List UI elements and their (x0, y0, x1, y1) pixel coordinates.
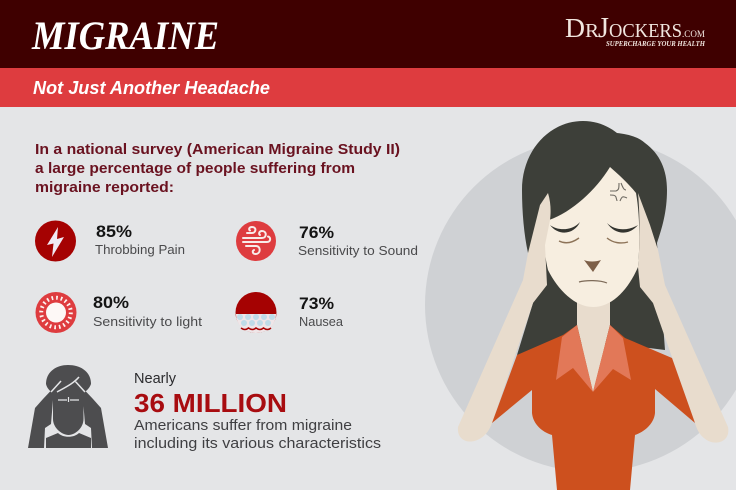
nose (584, 260, 601, 272)
collar: left (556, 325, 593, 392)
face (543, 167, 639, 307)
stat: nausea (236, 292, 343, 333)
callout: 36 million: Nearly (134, 371, 177, 387)
logo: DrJockers.com: OCKERS (609, 20, 682, 42)
stat: sensitivity to light: 80% (93, 293, 129, 312)
intro paragraph: migraine reported: (35, 180, 174, 196)
logo: DrJockers.com (565, 12, 706, 48)
illustration: woman with migraine (458, 121, 728, 490)
icon: lightning bolt (35, 220, 76, 262)
intro paragraph: a large percentage of people suffering from (35, 161, 355, 177)
subtitle band (0, 68, 736, 107)
callout: 36 million (134, 371, 381, 452)
stat: sensitivity to sound (236, 221, 418, 261)
stat: nausea: Nausea (299, 315, 343, 329)
header band (0, 0, 736, 68)
arm: left (458, 193, 551, 442)
hair (517, 121, 667, 355)
callout: 36 million: 36 MILLION (134, 390, 287, 418)
logo: DrJockers.com: R (585, 20, 600, 42)
mouth (579, 281, 607, 283)
anger mark (610, 183, 627, 201)
callout: 36 million: Americans suffer from migraine (134, 418, 352, 434)
neck (577, 285, 610, 392)
arm: right (638, 193, 728, 443)
stat: throbbing pain (35, 220, 185, 262)
subtitle: Not Just Another Headache (33, 78, 270, 98)
stat: sensitivity to sound: 76% (299, 223, 334, 242)
logo: DrJockers.com: J (598, 12, 609, 44)
collar: right (593, 325, 631, 392)
logo: DrJockers.com: .COM (682, 29, 705, 39)
logo: DrJockers.com: D (565, 13, 585, 43)
intro paragraph (35, 142, 400, 196)
stat: sensitivity to sound: Sensitivity to Sound (298, 244, 418, 258)
shirt (492, 325, 695, 490)
stat: sensitivity to light: Sensitivity to light (93, 315, 203, 329)
stat: sensitivity to light (36, 292, 203, 333)
stat: throbbing pain: 85% (96, 222, 132, 241)
stat: throbbing pain: Throbbing Pain (95, 243, 185, 257)
icon: person holding head (28, 365, 108, 448)
logo: DrJockers.com: SUPERCHARGE YOUR HEALTH (606, 39, 706, 48)
title: MIGRAINE (31, 13, 219, 58)
background circle (425, 138, 736, 472)
eyes (550, 222, 638, 233)
icon: waves (236, 292, 276, 333)
icon: sound waves (236, 221, 276, 261)
icon: sun (36, 292, 76, 333)
callout: 36 million: including its various characteristics (134, 436, 381, 452)
stat: nausea: 73% (299, 294, 334, 313)
lower eyelids (559, 238, 628, 243)
intro paragraph: In a national survey (American Migraine Study II) (35, 142, 400, 158)
